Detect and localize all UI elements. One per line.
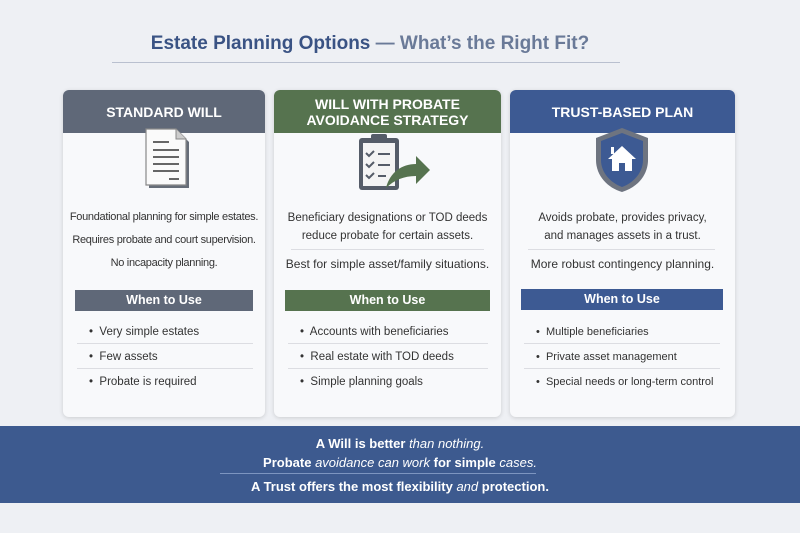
when to use bar: [285, 290, 490, 311]
bullets: • Few assets: [89, 351, 158, 363]
bullets: • Real estate with TOD deeds: [300, 351, 454, 363]
bottom summary band: [0, 426, 800, 503]
bullets: • Accounts with beneficiaries: [300, 326, 448, 338]
panel: trust-based plan: More robust contingency planning.: [531, 257, 714, 271]
heading: standard will: [63, 90, 265, 133]
icon: shield with house: [596, 128, 648, 192]
bullets: • Private asset management: [536, 351, 677, 363]
heading: probate avoidance: WILL WITH PROBATE: [315, 96, 460, 112]
text block: [538, 212, 707, 242]
heading: standard will: STANDARD WILL: [106, 104, 222, 120]
icon: clipboard with arrow: [359, 134, 430, 190]
text block: Foundational planning for simple estates.: [70, 211, 258, 223]
summary text: [263, 436, 537, 470]
when to use bar: When to Use: [350, 293, 425, 307]
icon: document: [145, 128, 189, 188]
text block: Beneficiary designations or TOD deeds: [288, 212, 487, 224]
text block: Avoids probate, provides privacy,: [538, 212, 707, 224]
bullets: • Special needs or long-term control: [536, 376, 714, 388]
bullets: [536, 326, 714, 388]
panel: will with probate avoidance: Best for simple asset/family situations.: [286, 257, 489, 271]
text block: and manages assets in a trust.: [544, 230, 701, 242]
when to use bar: [521, 289, 723, 310]
summary text: A Will is better than nothing.: [316, 436, 484, 451]
text block: No incapacity planning.: [111, 257, 217, 269]
summary text: Probate avoidance can work for simple cases.: [263, 455, 537, 470]
bullets: [89, 326, 199, 388]
panel: standard will: [63, 90, 265, 417]
bullets: [300, 326, 454, 388]
heading: probate avoidance: [274, 90, 501, 133]
bottom summary band: A Trust offers the most flexibility and protection.: [251, 479, 549, 494]
heading: trust: TRUST-BASED PLAN: [552, 104, 693, 120]
text block: [288, 212, 487, 242]
text block: reduce probate for certain assets.: [302, 230, 473, 242]
when to use bar: When to Use: [126, 293, 202, 307]
heading: trust: [510, 90, 735, 133]
panel: will with probate avoidance: [274, 90, 501, 417]
text block: [70, 211, 258, 269]
when to use bar: When to Use: [584, 292, 660, 306]
when to use bar: [75, 290, 253, 311]
panel: trust-based plan: [510, 90, 735, 417]
title: Estate Planning Options — What’s the Right Fit?: [151, 33, 589, 54]
bullets: • Multiple beneficiaries: [536, 326, 649, 338]
bullets: • Simple planning goals: [300, 376, 423, 388]
text block: Requires probate and court supervision.: [72, 234, 256, 246]
bullets: • Very simple estates: [89, 326, 199, 338]
heading: probate avoidance: AVOIDANCE STRATEGY: [306, 112, 469, 128]
bullets: • Probate is required: [89, 376, 197, 388]
